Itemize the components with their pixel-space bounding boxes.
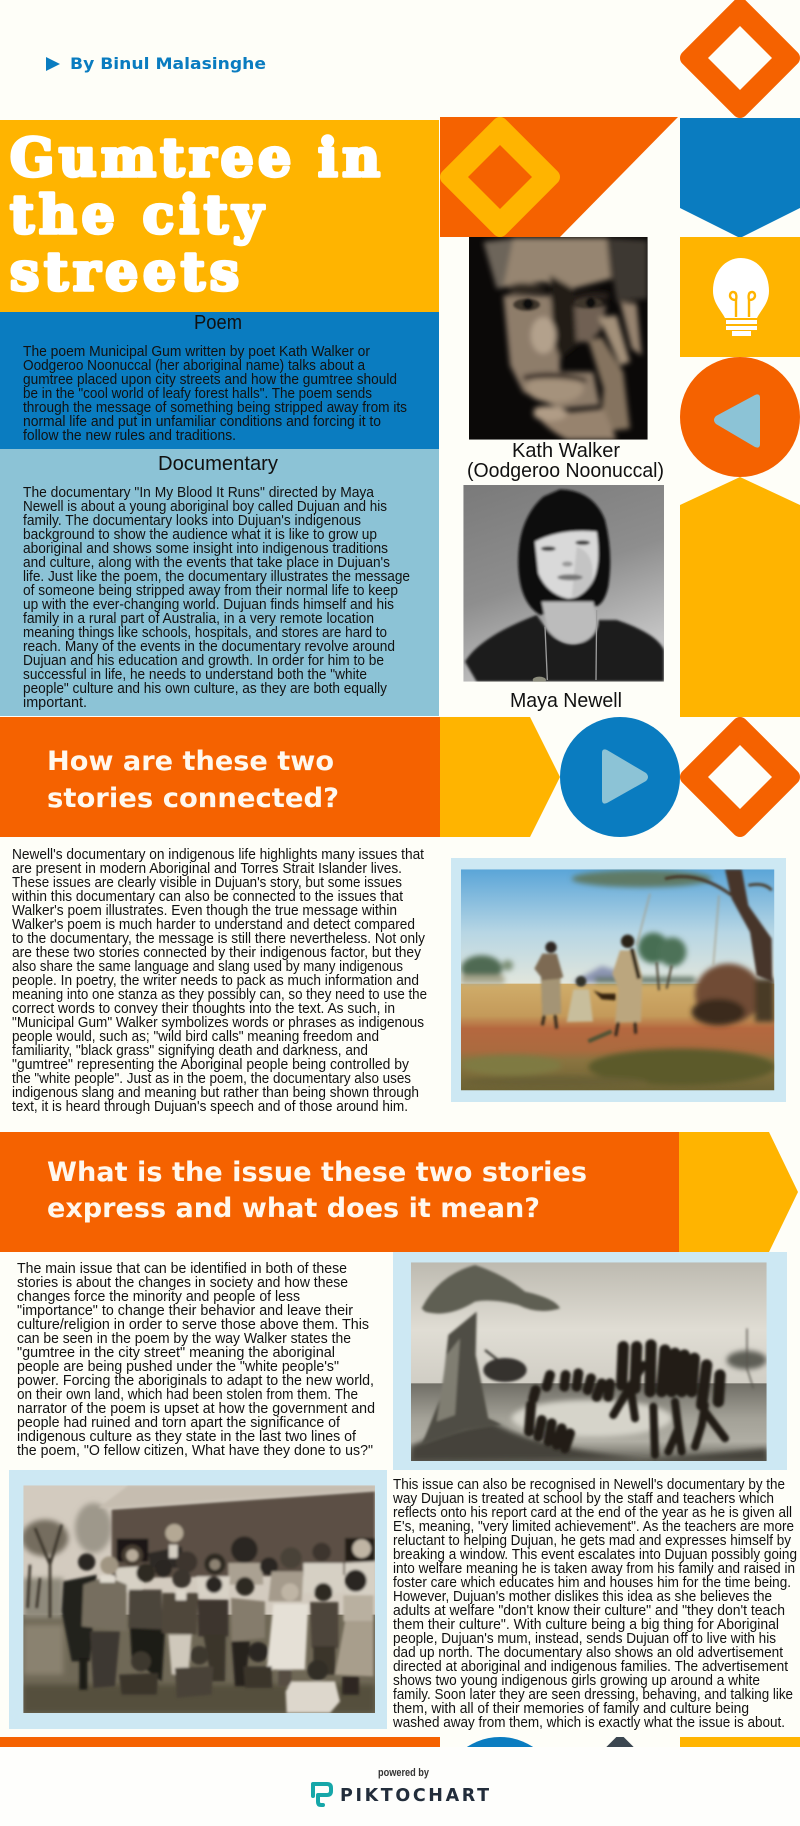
heading band: what is the issue: What is the issue these two stories <box>47 1157 587 1188</box>
text block: documentary summary: aboriginal and shows some insight into indigenous traditions <box>23 540 388 557</box>
icon: Piktochart logo <box>313 1784 331 1805</box>
arrow: yellow right arrow <box>679 1132 798 1252</box>
sub-element: front row <box>131 1651 151 1671</box>
text block: the main issue: people had ruined and torn apart the significance of <box>17 1414 341 1431</box>
text block: how the stories connect: are these two stories connected by their indigenous factor, but they <box>12 944 421 961</box>
text block: documentary summary: The documentary "In My Blood It Runs" directed by Maya <box>23 484 375 501</box>
sub-element: tree <box>422 1265 560 1314</box>
sub-element: seated row <box>529 1373 610 1448</box>
text block: documentary summary: of someone being stripped away from their normal life to keep <box>23 582 398 599</box>
icon: top orange diamond <box>688 6 792 110</box>
text block: poem summary: gumtree placed upon city streets and how the gumtree should <box>23 371 397 388</box>
text block: how the stories connect: Newell's documentary on indigenous life highlights many issues that <box>12 846 425 863</box>
text block: documentary summary: and culture, along with the events that take place in Dujuan's <box>23 554 390 571</box>
text block: issue in the documentary: them their culture". With culture being a big thing for Aboriginal <box>393 1616 779 1633</box>
text block: how the stories connect: also share the same language and slang used by many indigenous <box>12 958 403 975</box>
text block: documentary summary: people" culture and his own culture, as they are both equally <box>23 680 387 697</box>
text block: how the stories connect: meaning into one stanza as they possibly can, so they need to use the <box>12 986 427 1003</box>
sub-element: foreground dancers <box>613 1365 725 1455</box>
decoration: yellow upward pentagon <box>680 477 800 717</box>
heading band: how are these two stories connected: How are these two <box>47 746 334 777</box>
text block: the main issue: "gumtree in the city street" meaning the aboriginal <box>17 1344 335 1361</box>
text block: the main issue: "importance" to change their behavior and leave their <box>17 1302 353 1319</box>
footer: powered by Piktochart: powered by <box>378 1767 430 1779</box>
text block: documentary summary: up with the ever-changing world. Dujuan finds himself and his <box>23 596 394 613</box>
icon: orange diamond <box>688 725 792 829</box>
sub-element: roof <box>98 1485 375 1508</box>
photo: Kath Walker portrait <box>469 237 648 440</box>
decoration: blue pentagon <box>680 118 800 238</box>
text block: the main issue: culture/religion in order to serve those above them. This <box>17 1316 369 1333</box>
text block: the main issue <box>17 1260 375 1459</box>
text block: how the stories connect <box>11 846 427 1115</box>
heading band: how are these two stories connected <box>0 717 440 837</box>
heading: documentary: Documentary <box>158 452 279 475</box>
caption: Kath Walker: Kath Walker <box>512 439 620 462</box>
text block: documentary summary: Newell is about a young aboriginal boy called Dujuan and his <box>23 498 387 515</box>
text block: how the stories connect: familiarity, "black grass" signifying death and darkness, and <box>12 1042 368 1059</box>
text block: the main issue: power. Forcing the aboriginals to adapt to the new world, <box>17 1372 374 1389</box>
sub-element: standing figure right <box>621 935 634 948</box>
text block: documentary summary: successful in life, he needs to understand both the "white <box>23 666 367 683</box>
text block: how the stories connect: the "white people". Just as in the poem, the documentary also uses <box>12 1070 411 1087</box>
text block: the main issue: can be seen in the poem by the way Walker states the <box>17 1330 351 1347</box>
text block: how the stories connect: Walker's poem illustrates. Even though the true message within <box>12 902 397 919</box>
text block: poem summary <box>23 343 407 444</box>
icon: light bulb on yellow square <box>680 237 800 357</box>
text block: poem summary: normal life and put in unfamiliar conditions and forcing it to <box>23 413 381 430</box>
sub-element: left children <box>78 1553 95 1571</box>
text block: the main issue: the poem, "O fellow citizen, What have they done to us?" <box>17 1442 373 1459</box>
image: framed painting of Aboriginal figures <box>451 858 786 1102</box>
text block: documentary summary: family in a rural part of Australia, in a very remote location <box>23 610 374 627</box>
decoration: orange triangle with yellow diamond <box>440 117 678 237</box>
panel: poem <box>0 311 439 449</box>
heading band: how are these two stories connected: stories connected? <box>47 783 339 814</box>
panel: title: Gumtree in <box>10 128 380 189</box>
text block: the main issue: on their own land, which had been stolen from them. The <box>17 1386 358 1403</box>
text block: the main issue: changes force the minority and people of less <box>17 1288 300 1305</box>
text block: how the stories connect: people. In poetry, the writer needs to pack as much information and <box>12 972 419 989</box>
image: framed historical group photo <box>9 1470 387 1729</box>
text block: issue in the documentary <box>392 1476 797 1731</box>
text block: how the stories connect: people would, such as; "wild bird calls" meaning freedom and <box>12 1028 379 1045</box>
text block: issue in the documentary: them, with all of their memories of family and culture being <box>393 1700 749 1717</box>
caption: Kath Walker: (Oodgeroo Noonuccal) <box>467 459 664 482</box>
photo: Maya Newell portrait <box>463 485 664 683</box>
heading band: what is the issue: express and what does it mean? <box>47 1193 540 1224</box>
sub-element: standing dancers <box>622 1345 720 1405</box>
sub-element: dog <box>593 990 616 1000</box>
text block: how the stories connect: Walker's poem is much harder to understand and detect compared <box>12 916 415 933</box>
heading band: what is the issue <box>0 1132 679 1252</box>
icon: byline triangle <box>46 57 60 71</box>
panel: title: streets <box>10 242 239 303</box>
text block: the main issue: The main issue that can be identified in both of these <box>17 1260 347 1277</box>
sub-element: standing figure left <box>545 942 557 953</box>
text block: documentary summary: life. Just like the poem, the documentary illustrates the message <box>23 568 410 585</box>
text block: poem summary: Oodgeroo Noonuccal (her aboriginal name) talks about a <box>23 357 366 374</box>
text block: how the stories connect: "Municipal Gum" Walker symbolizes words or phrases as indigenous <box>12 1014 424 1031</box>
sub-element: wall <box>112 1491 375 1578</box>
author byline: By Binul Malasinghe <box>70 54 266 73</box>
text block: how the stories connect: within this documentary can also be connected to the issues that <box>11 888 404 905</box>
text block: documentary summary <box>23 484 410 711</box>
text block: the main issue: people are being pushed under the "white people's" <box>17 1358 339 1375</box>
panel: documentary <box>0 449 439 716</box>
image: framed engraving of corroboree <box>393 1252 787 1470</box>
text block: documentary summary: important. <box>23 694 87 711</box>
text block: documentary summary: meaning things like schools, hospitals, and stores are hard to <box>23 624 387 641</box>
text block: issue in the documentary: shows two young indigenous girls growing up around a white <box>393 1672 760 1689</box>
text block: how the stories connect: indigenous slang and meaning but rather than being shown through <box>12 1084 419 1101</box>
text block: documentary summary: family. The documentary looks into Dujuan's indigenous <box>23 512 361 529</box>
footer: powered by Piktochart <box>0 1747 800 1826</box>
arrow: yellow chevron <box>440 717 560 837</box>
decoration: cut-off bottom shapes <box>0 1737 800 1747</box>
text block: the main issue: indigenous culture as they state in the last two lines of <box>17 1428 357 1445</box>
text block: poem summary: be in the "cool world of leafy forest halls". The poem sends <box>23 385 372 402</box>
text block: poem summary: The poem Municipal Gum written by poet Kath Walker or <box>23 343 370 360</box>
sub-element: seated figure <box>576 976 586 987</box>
text block: the main issue: stories is about the changes in society and how these <box>17 1274 348 1291</box>
sub-element: tree trunk <box>725 869 772 982</box>
panel: title: the city <box>10 185 265 246</box>
panel: title <box>0 120 439 312</box>
text block: poem summary: through the message of something being stripped away from its <box>23 399 407 416</box>
text block: the main issue: narrator of the poem is upset at how the government and <box>17 1400 375 1417</box>
text block: how the stories connect: to the documentary, the message is still there nevertheless. Not only <box>12 930 425 947</box>
caption: Maya Newell: Maya Newell <box>510 689 622 712</box>
text block: how the stories connect: text, it is heard through Dujuan's speech and of those around him. <box>12 1098 408 1115</box>
caption: Kath Walker <box>467 439 664 482</box>
text block: how the stories connect: are present in modern Aboriginal and Torres Strait Islander lives. <box>12 860 402 877</box>
heading: poem: Poem <box>194 311 242 334</box>
footer: powered by Piktochart: PIKTOCHART <box>340 1786 489 1806</box>
text block: documentary summary: Dujuan and his education and growth. In order for him to be <box>23 652 384 669</box>
sub-element: right children <box>236 1577 254 1596</box>
icon: orange circle with left arrow <box>680 357 800 477</box>
text block: poem summary: follow the new rules and traditions. <box>23 427 236 444</box>
text block: documentary summary: reach. Many of the events in the documentary revolve around <box>23 638 395 655</box>
icon: blue circle with play arrow <box>560 717 680 837</box>
text block: how the stories connect: correct words to convey their thoughts into the text. As such, in <box>12 1000 395 1017</box>
text block: issue in the documentary: way Dujuan is treated at school by the staff and teachers which <box>392 1490 774 1507</box>
sub-element: back row <box>165 1524 183 1542</box>
text block: documentary summary: background to show the audience what it is like to grow up <box>23 526 377 543</box>
text block: how the stories connect: These issues are clearly visible in Dujuan's story, but some issues <box>12 874 402 891</box>
text block: how the stories connect: "gumtree" representing the Aboriginal people being controlled by <box>12 1056 409 1073</box>
